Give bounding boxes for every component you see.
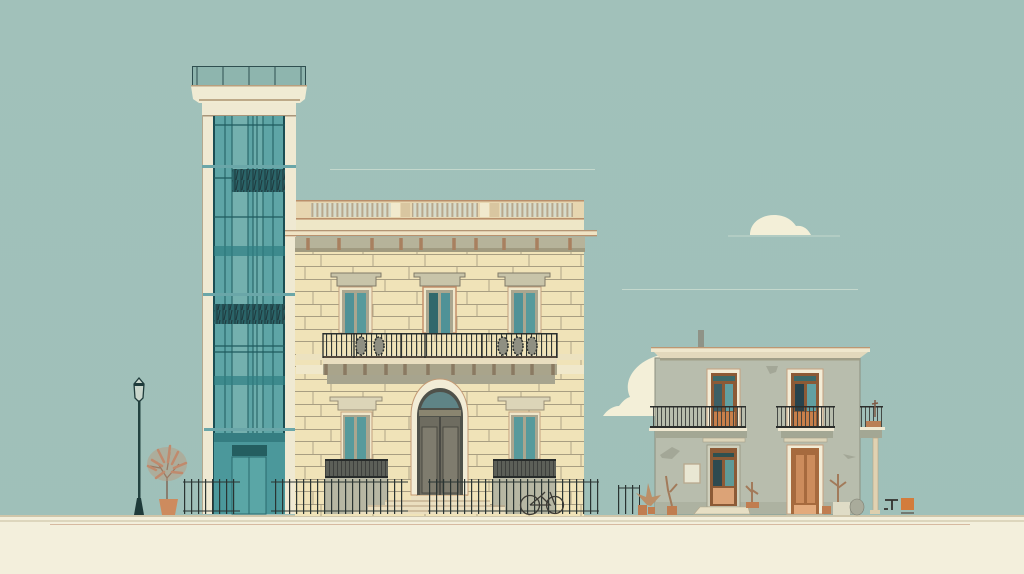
tower floor bands: [202, 165, 296, 431]
balconette right: [493, 459, 556, 478]
lower door right: [784, 438, 827, 514]
tower: [191, 66, 307, 514]
potted plants: [636, 474, 864, 515]
door step: [694, 507, 750, 514]
wall stains: [660, 366, 856, 459]
main balcony: [323, 333, 557, 384]
side balcony and column: [860, 400, 885, 514]
tower entrance door: [214, 433, 285, 514]
main building: [285, 200, 597, 516]
lower door left: [703, 438, 745, 507]
tower glass curtain wall: [213, 116, 285, 514]
tower frieze and pilasters: [202, 103, 296, 514]
main cornice: [285, 230, 597, 252]
left balcony: [649, 406, 747, 438]
balconette left: [325, 459, 388, 478]
upper right window: [787, 369, 823, 429]
attic band: [296, 219, 584, 231]
small objects far right: [884, 498, 914, 513]
tower cornice: [191, 85, 307, 103]
bicycle: [520, 492, 564, 514]
window centre: [414, 273, 465, 333]
tower grille upper: [232, 169, 285, 192]
chimney: [698, 330, 704, 347]
thin cloud streaks: [330, 170, 858, 290]
iron fence segments: [183, 479, 640, 514]
stone urns: [833, 502, 850, 515]
potted tree: [147, 446, 187, 515]
cloud: upper right: [750, 215, 811, 235]
small house wall: [655, 358, 860, 514]
wall with masonry: [295, 252, 584, 516]
small house: [636, 330, 885, 515]
lower window left: [330, 397, 382, 459]
arched entrance door: [411, 379, 468, 495]
lower windows: [330, 397, 550, 459]
upper left window: [707, 369, 740, 429]
tower grille lower: [214, 304, 285, 324]
tower roof railing: [192, 66, 306, 86]
entrance steps: [353, 496, 505, 514]
cloud: behind small house: [603, 355, 660, 416]
ground: [0, 515, 1024, 574]
wall picture: [684, 464, 700, 483]
window right: [498, 273, 550, 333]
lower window right: [498, 397, 550, 459]
plinths under lower windows: [325, 478, 556, 514]
roof cornice: [651, 347, 870, 360]
upper windows: [331, 273, 550, 333]
window left: [331, 273, 381, 333]
plain bands beside balcony: [296, 354, 584, 374]
right balcony: [776, 406, 835, 438]
street lamp: [134, 378, 144, 515]
balustrade: [296, 200, 584, 220]
